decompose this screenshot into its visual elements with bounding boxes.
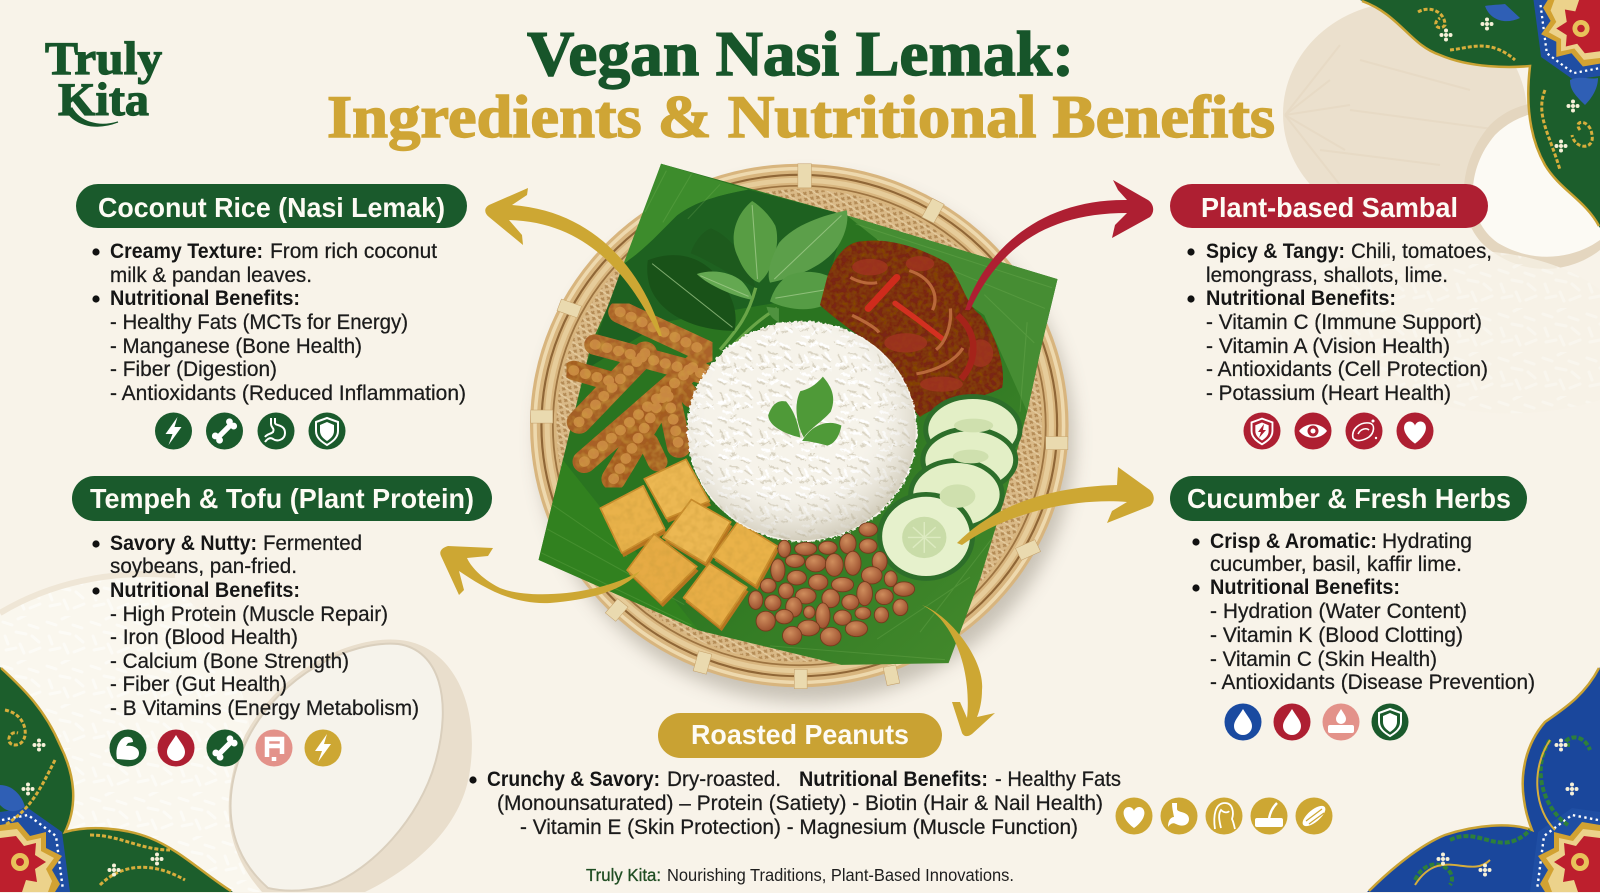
text block [92, 240, 466, 405]
text block: Nutritional Benefits: [110, 287, 300, 310]
text block: - Healthy Fats [995, 768, 1121, 791]
icons: water, blood, skin, shield [1224, 704, 1408, 740]
panel: cucumber and fresh herbs [1170, 476, 1535, 740]
text block: - Vitamin C (Immune Support) [1206, 311, 1482, 334]
title [327, 18, 1275, 150]
text block: - Antioxidants (Disease Prevention) [1210, 671, 1535, 694]
heading pill: Plant-based Sambal [1201, 192, 1458, 223]
text block: - Fiber (Gut Health) [110, 673, 287, 696]
arrow: cucumber and herbs [957, 467, 1154, 545]
panel: roasted peanuts [469, 713, 1332, 839]
text block: Fermented [263, 532, 362, 555]
text block: Dry-roasted. [667, 768, 781, 791]
text block: Nutritional Benefits: [799, 768, 988, 791]
arrow: plant-based sambal [965, 180, 1153, 310]
text block: - B Vitamins (Energy Metabolism) [110, 697, 419, 720]
panel: plant-based sambal [1170, 184, 1492, 450]
icons: energy, bone, stomach, shield [155, 412, 346, 450]
title: Ingredients & Nutritional Benefits [327, 84, 1275, 150]
text block: - Vitamin A (Vision Health) [1206, 335, 1450, 358]
banana leaf [539, 164, 1057, 665]
text block: Creamy Texture: [110, 240, 263, 263]
heading pill [1170, 184, 1488, 228]
icons: muscle, drop, bone, gut, energy [110, 730, 342, 766]
footer tagline: Nourishing Traditions, Plant-Based Innovations. [667, 865, 1014, 885]
text block: - Vitamin K (Blood Clotting) [1210, 624, 1463, 647]
text block: - Manganese (Bone Health) [110, 335, 362, 358]
tofu [600, 459, 779, 631]
panel: tempeh and tofu [72, 476, 492, 766]
heading pill: Tempeh & Tofu (Plant Protein) [90, 483, 474, 514]
text block [1192, 530, 1535, 694]
central dish: nasi lemak on bamboo tray [530, 164, 1074, 702]
text block: Chili, tomatoes, [1351, 240, 1492, 263]
text block: Spicy & Tangy: [1206, 240, 1345, 263]
tofu side faces [602, 463, 779, 631]
heading pill [72, 476, 492, 521]
text block: - High Protein (Muscle Repair) [110, 603, 388, 626]
text block: - Antioxidants (Reduced Inflammation) [110, 382, 466, 405]
text block: - Fiber (Digestion) [110, 358, 277, 381]
text block: Crisp & Aromatic: [1210, 530, 1377, 553]
text block: Hydrating [1382, 530, 1472, 553]
herbs: basil and kaffir lime leaves [647, 201, 847, 351]
corner ornament: bottom left batik [0, 667, 233, 892]
arrow: tempeh and tofu [440, 546, 640, 603]
text block [469, 768, 1121, 839]
text block: Savory & Nutty: [110, 532, 257, 555]
text block: - Iron (Blood Health) [110, 626, 298, 649]
text block: soybeans, pan-fried. [110, 555, 297, 578]
text block: cucumber, basil, kaffir lime. [1210, 553, 1462, 576]
arrow: coconut rice [485, 188, 662, 336]
rice dome [687, 321, 917, 542]
heading pill: Cucumber & Fresh Herbs [1187, 483, 1511, 514]
logo: Truly Kita: Kita [58, 74, 149, 126]
heading pill [76, 184, 467, 228]
logo: Truly Kita [45, 33, 163, 126]
title: Vegan Nasi Lemak: [527, 18, 1074, 89]
text block: Crunchy & Savory: [487, 768, 660, 791]
text block: (Monounsaturated) – Protein (Satiety) - Biotin (Hair & Nail Health) [497, 792, 1103, 815]
text block: Nutritional Benefits: [110, 579, 300, 602]
text block: - Potassium (Heart Health) [1206, 382, 1451, 405]
text block [92, 532, 419, 720]
text block: milk & pandan leaves. [110, 264, 312, 287]
bamboo tray [530, 164, 1069, 689]
background image: coconut half bottom left [229, 640, 472, 892]
text block: Nutritional Benefits: [1206, 287, 1396, 310]
icons: immune, eye, cell, heart [1244, 412, 1434, 450]
text block: From rich coconut [270, 240, 437, 263]
logo: Truly Kita: Truly [45, 33, 163, 85]
sambal [820, 241, 1003, 417]
arrow: roasted peanuts [922, 605, 995, 736]
text block: - Antioxidants (Cell Protection) [1206, 358, 1488, 381]
heading pill: Coconut Rice (Nasi Lemak) [98, 192, 445, 223]
peanuts [749, 523, 915, 646]
icons: heart, stomach, hair, skin, muscle [1116, 798, 1332, 834]
heading pill [1170, 476, 1527, 521]
tray shadow [538, 178, 1074, 702]
background image: coconut top right [1283, 2, 1600, 413]
text block [1187, 240, 1492, 405]
text block: - Vitamin C (Skin Health) [1210, 648, 1437, 671]
corner ornament: top right batik [1360, 0, 1600, 228]
cucumber slices [880, 397, 1020, 578]
panel: coconut rice [76, 184, 467, 450]
corner ornament: bottom right batik [1367, 667, 1600, 892]
heading pill [658, 713, 942, 758]
heading pill: Roasted Peanuts [691, 719, 909, 750]
tempeh [574, 312, 706, 479]
background image: rice bowl bottom left [0, 574, 270, 892]
text block: - Healthy Fats (MCTs for Energy) [110, 311, 408, 334]
text block: - Hydration (Water Content) [1210, 600, 1467, 623]
text block: Nutritional Benefits: [1210, 576, 1400, 599]
cilantro garnish [768, 377, 841, 445]
text block: - Vitamin E (Skin Protection) - Magnesium (Muscle Function) [520, 816, 1078, 839]
text block: - Calcium (Bone Strength) [110, 650, 349, 673]
text block: lemongrass, shallots, lime. [1206, 264, 1448, 287]
footer tagline: Truly Kita: [586, 865, 661, 885]
